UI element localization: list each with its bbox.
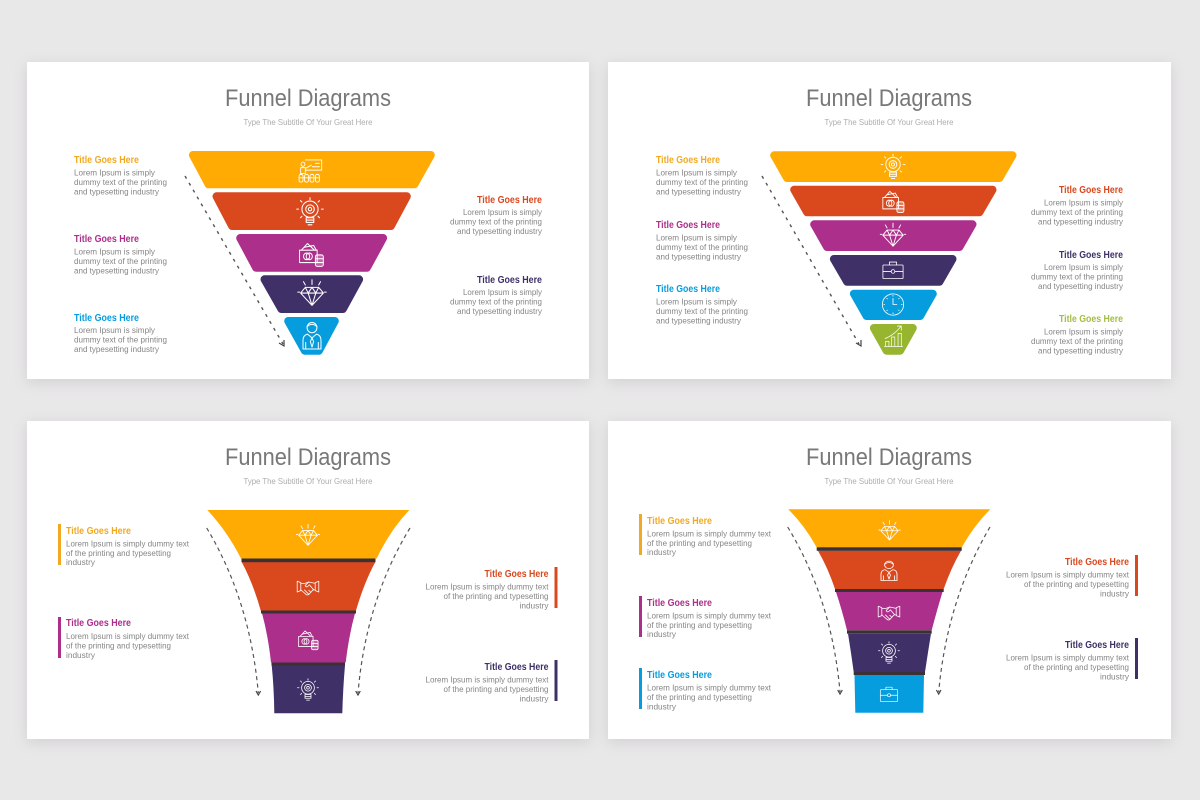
text block: yellow: Lorem Ipsum is simply bbox=[74, 168, 156, 178]
icon: growth chart bbox=[884, 326, 903, 346]
text block: blue: Title Goes Here bbox=[656, 284, 720, 295]
panel: top-left funnel slide bbox=[27, 62, 589, 379]
text block: yellow: and typesetting industry bbox=[656, 186, 742, 196]
text block: orange: Title Goes Here bbox=[1059, 185, 1123, 196]
icon: handshake bbox=[297, 581, 319, 595]
icon: handshake bbox=[878, 606, 900, 620]
subtitle: Type The Subtitle Of Your Great Here bbox=[244, 117, 373, 127]
icon: light bulb bbox=[298, 679, 318, 700]
text block: purple: Lorem Ipsum is simply bbox=[1044, 262, 1124, 272]
text block: purple: Lorem Ipsum is simply bbox=[463, 287, 543, 297]
text block: purple: Lorem Ipsum is simply dummy text bbox=[426, 674, 549, 684]
text block: magenta bbox=[74, 234, 167, 276]
text block: magenta: Title Goes Here bbox=[74, 234, 139, 245]
text block: blue: Lorem Ipsum is simply bbox=[74, 325, 156, 335]
text block: orange bbox=[450, 195, 543, 236]
text block: blue: and typesetting industry bbox=[74, 344, 160, 354]
text block: blue bbox=[74, 313, 167, 354]
title: Funnel Diagrams bbox=[806, 85, 972, 112]
icon: light bulb bbox=[297, 198, 323, 225]
text block: yellow: Title Goes Here bbox=[74, 155, 139, 166]
text block: purple: Title Goes Here bbox=[484, 662, 549, 673]
text block: blue: Title Goes Here bbox=[647, 670, 712, 681]
text block: yellow: of the printing and typesetting bbox=[66, 548, 171, 558]
text block: yellow bbox=[639, 514, 772, 557]
text block: orange bbox=[426, 567, 558, 610]
text block: purple bbox=[450, 275, 543, 316]
text block: yellow: dummy text of the printing bbox=[656, 177, 748, 187]
text block: green: dummy text of the printing bbox=[1031, 336, 1123, 346]
text block: blue: of the printing and typesetting bbox=[647, 692, 752, 702]
text block: orange: and typesetting industry bbox=[457, 226, 543, 236]
text block: purple: industry bbox=[1100, 672, 1130, 682]
text block: yellow: Lorem Ipsum is simply dummy text bbox=[647, 528, 772, 538]
text block: yellow: Lorem Ipsum is simply bbox=[656, 168, 738, 178]
text block: yellow: Title Goes Here bbox=[66, 526, 131, 537]
text block: purple: industry bbox=[520, 694, 549, 704]
text block: orange bbox=[1031, 185, 1124, 226]
text block: magenta: Lorem Ipsum is simply dummy text bbox=[66, 631, 190, 641]
text block: green: Lorem Ipsum is simply bbox=[1044, 326, 1124, 336]
icon: briefcase bbox=[883, 262, 903, 279]
text block: magenta: industry bbox=[647, 629, 677, 639]
funnel: four curved bands bbox=[207, 510, 409, 713]
text block: yellow: of the printing and typesetting bbox=[647, 538, 752, 548]
text block: yellow: dummy text of the printing bbox=[74, 177, 167, 187]
text block: magenta bbox=[656, 220, 748, 262]
icon: diamond bbox=[298, 280, 326, 305]
text block: yellow bbox=[74, 155, 167, 196]
text block: magenta: Title Goes Here bbox=[656, 220, 720, 231]
text block: orange: industry bbox=[1100, 588, 1130, 598]
text block: yellow bbox=[656, 155, 748, 196]
text block: blue bbox=[639, 668, 772, 712]
funnel: five curved bands bbox=[788, 509, 990, 713]
text block: green: Title Goes Here bbox=[1059, 314, 1123, 325]
icon: money bbox=[883, 191, 904, 212]
text block: orange: Title Goes Here bbox=[1065, 557, 1129, 568]
text block: blue: Lorem Ipsum is simply bbox=[656, 296, 738, 306]
icon: money bbox=[299, 631, 318, 650]
text block: purple bbox=[1006, 638, 1138, 682]
text block: magenta: of the printing and typesetting bbox=[66, 640, 171, 650]
text block: magenta: of the printing and typesetting bbox=[647, 620, 752, 630]
text block: purple: dummy text of the printing bbox=[450, 296, 542, 306]
icon: clock bbox=[882, 294, 904, 315]
text block: blue bbox=[656, 284, 748, 326]
text block: blue: Title Goes Here bbox=[74, 313, 139, 324]
subtitle: Type The Subtitle Of Your Great Here bbox=[244, 476, 373, 486]
title: Funnel Diagrams bbox=[225, 444, 391, 471]
arrow: left curved dashed bbox=[207, 528, 261, 695]
subtitle: Type The Subtitle Of Your Great Here bbox=[824, 117, 954, 127]
panel: bottom-left funnel slide bbox=[27, 421, 589, 739]
funnel: six tapered bands bbox=[774, 155, 1012, 351]
icon: businessman bbox=[303, 323, 321, 349]
text block: yellow: Title Goes Here bbox=[656, 155, 720, 166]
text block: magenta: dummy text of the printing bbox=[74, 256, 167, 266]
text block: magenta: and typesetting industry bbox=[656, 252, 742, 262]
text block: magenta: industry bbox=[66, 650, 96, 660]
text block: orange: industry bbox=[520, 600, 549, 610]
arrow: dashed descent bbox=[762, 176, 861, 346]
panel: bottom-right funnel slide bbox=[608, 421, 1171, 739]
text block: magenta: and typesetting industry bbox=[74, 266, 160, 276]
text block: yellow: Title Goes Here bbox=[647, 516, 712, 527]
text block: orange: Title Goes Here bbox=[484, 569, 549, 580]
panel: top-right funnel slide bbox=[608, 62, 1171, 379]
text block: purple: Title Goes Here bbox=[1059, 250, 1123, 261]
text block: magenta bbox=[639, 596, 772, 639]
text block: magenta: Lorem Ipsum is simply bbox=[656, 232, 738, 242]
text block: orange: of the printing and typesetting bbox=[1024, 579, 1129, 589]
icon: briefcase bbox=[880, 687, 898, 701]
text block: purple bbox=[1031, 250, 1124, 291]
text block: orange bbox=[1006, 555, 1138, 598]
icon: diamond bbox=[880, 223, 906, 246]
text block: purple bbox=[426, 660, 558, 704]
text block: magenta: dummy text of the printing bbox=[656, 242, 748, 252]
icon: money bbox=[300, 244, 323, 266]
text block: orange: dummy text of the printing bbox=[450, 216, 542, 226]
text block: purple: Lorem Ipsum is simply dummy text bbox=[1006, 652, 1130, 662]
icon: presentation board bbox=[299, 160, 322, 182]
text block: magenta: Lorem Ipsum is simply dummy text bbox=[647, 610, 772, 620]
text block: orange: dummy text of the printing bbox=[1031, 207, 1123, 217]
text block: orange: and typesetting industry bbox=[1038, 216, 1124, 226]
title: Funnel Diagrams bbox=[225, 85, 391, 112]
icon: diamond bbox=[296, 524, 320, 545]
text block: orange: Lorem Ipsum is simply bbox=[1044, 198, 1124, 208]
arrow: right curved dashed bbox=[356, 528, 410, 695]
text block: purple: Title Goes Here bbox=[1065, 640, 1129, 651]
text block: yellow: Lorem Ipsum is simply dummy text bbox=[66, 538, 190, 548]
text block: green bbox=[1031, 314, 1124, 356]
text block: purple: Title Goes Here bbox=[477, 275, 542, 286]
icon: diamond bbox=[879, 521, 900, 540]
text block: orange: Lorem Ipsum is simply dummy text bbox=[1006, 570, 1130, 580]
arrow: left curved dashed bbox=[788, 527, 842, 694]
text block: yellow: industry bbox=[66, 557, 96, 567]
arrow: dashed descent bbox=[185, 176, 284, 346]
text block: magenta: Title Goes Here bbox=[647, 598, 712, 609]
text block: blue: Lorem Ipsum is simply dummy text bbox=[647, 682, 772, 692]
text block: magenta bbox=[58, 617, 190, 660]
text block: purple: and typesetting industry bbox=[457, 306, 543, 316]
text block: magenta: Lorem Ipsum is simply bbox=[74, 246, 156, 256]
text block: purple: dummy text of the printing bbox=[1031, 272, 1123, 282]
icon: businessman bbox=[881, 561, 897, 581]
text block: blue: dummy text of the printing bbox=[74, 334, 167, 344]
text block: orange: Lorem Ipsum is simply dummy text bbox=[426, 582, 549, 592]
text block: orange: of the printing and typesetting bbox=[444, 591, 549, 601]
text block: orange: Title Goes Here bbox=[477, 195, 542, 206]
text block: green: and typesetting industry bbox=[1038, 346, 1124, 356]
arrow: right curved dashed bbox=[936, 527, 990, 694]
text block: yellow bbox=[58, 524, 190, 567]
text block: yellow: and typesetting industry bbox=[74, 186, 160, 196]
text block: blue: industry bbox=[647, 702, 677, 712]
text block: orange: Lorem Ipsum is simply bbox=[463, 207, 543, 217]
text block: magenta: Title Goes Here bbox=[66, 618, 131, 629]
text block: purple: of the printing and typesetting bbox=[1024, 662, 1129, 672]
text block: blue: and typesetting industry bbox=[656, 316, 742, 326]
text block: purple: of the printing and typesetting bbox=[444, 684, 549, 694]
funnel: five tapered bands bbox=[193, 155, 431, 351]
icon: light bulb bbox=[878, 642, 900, 663]
text block: purple: and typesetting industry bbox=[1038, 281, 1124, 291]
title: Funnel Diagrams bbox=[806, 444, 972, 471]
icon: light bulb bbox=[881, 154, 905, 178]
subtitle: Type The Subtitle Of Your Great Here bbox=[824, 476, 954, 486]
text block: yellow: industry bbox=[647, 547, 677, 557]
text block: blue: dummy text of the printing bbox=[656, 306, 748, 316]
